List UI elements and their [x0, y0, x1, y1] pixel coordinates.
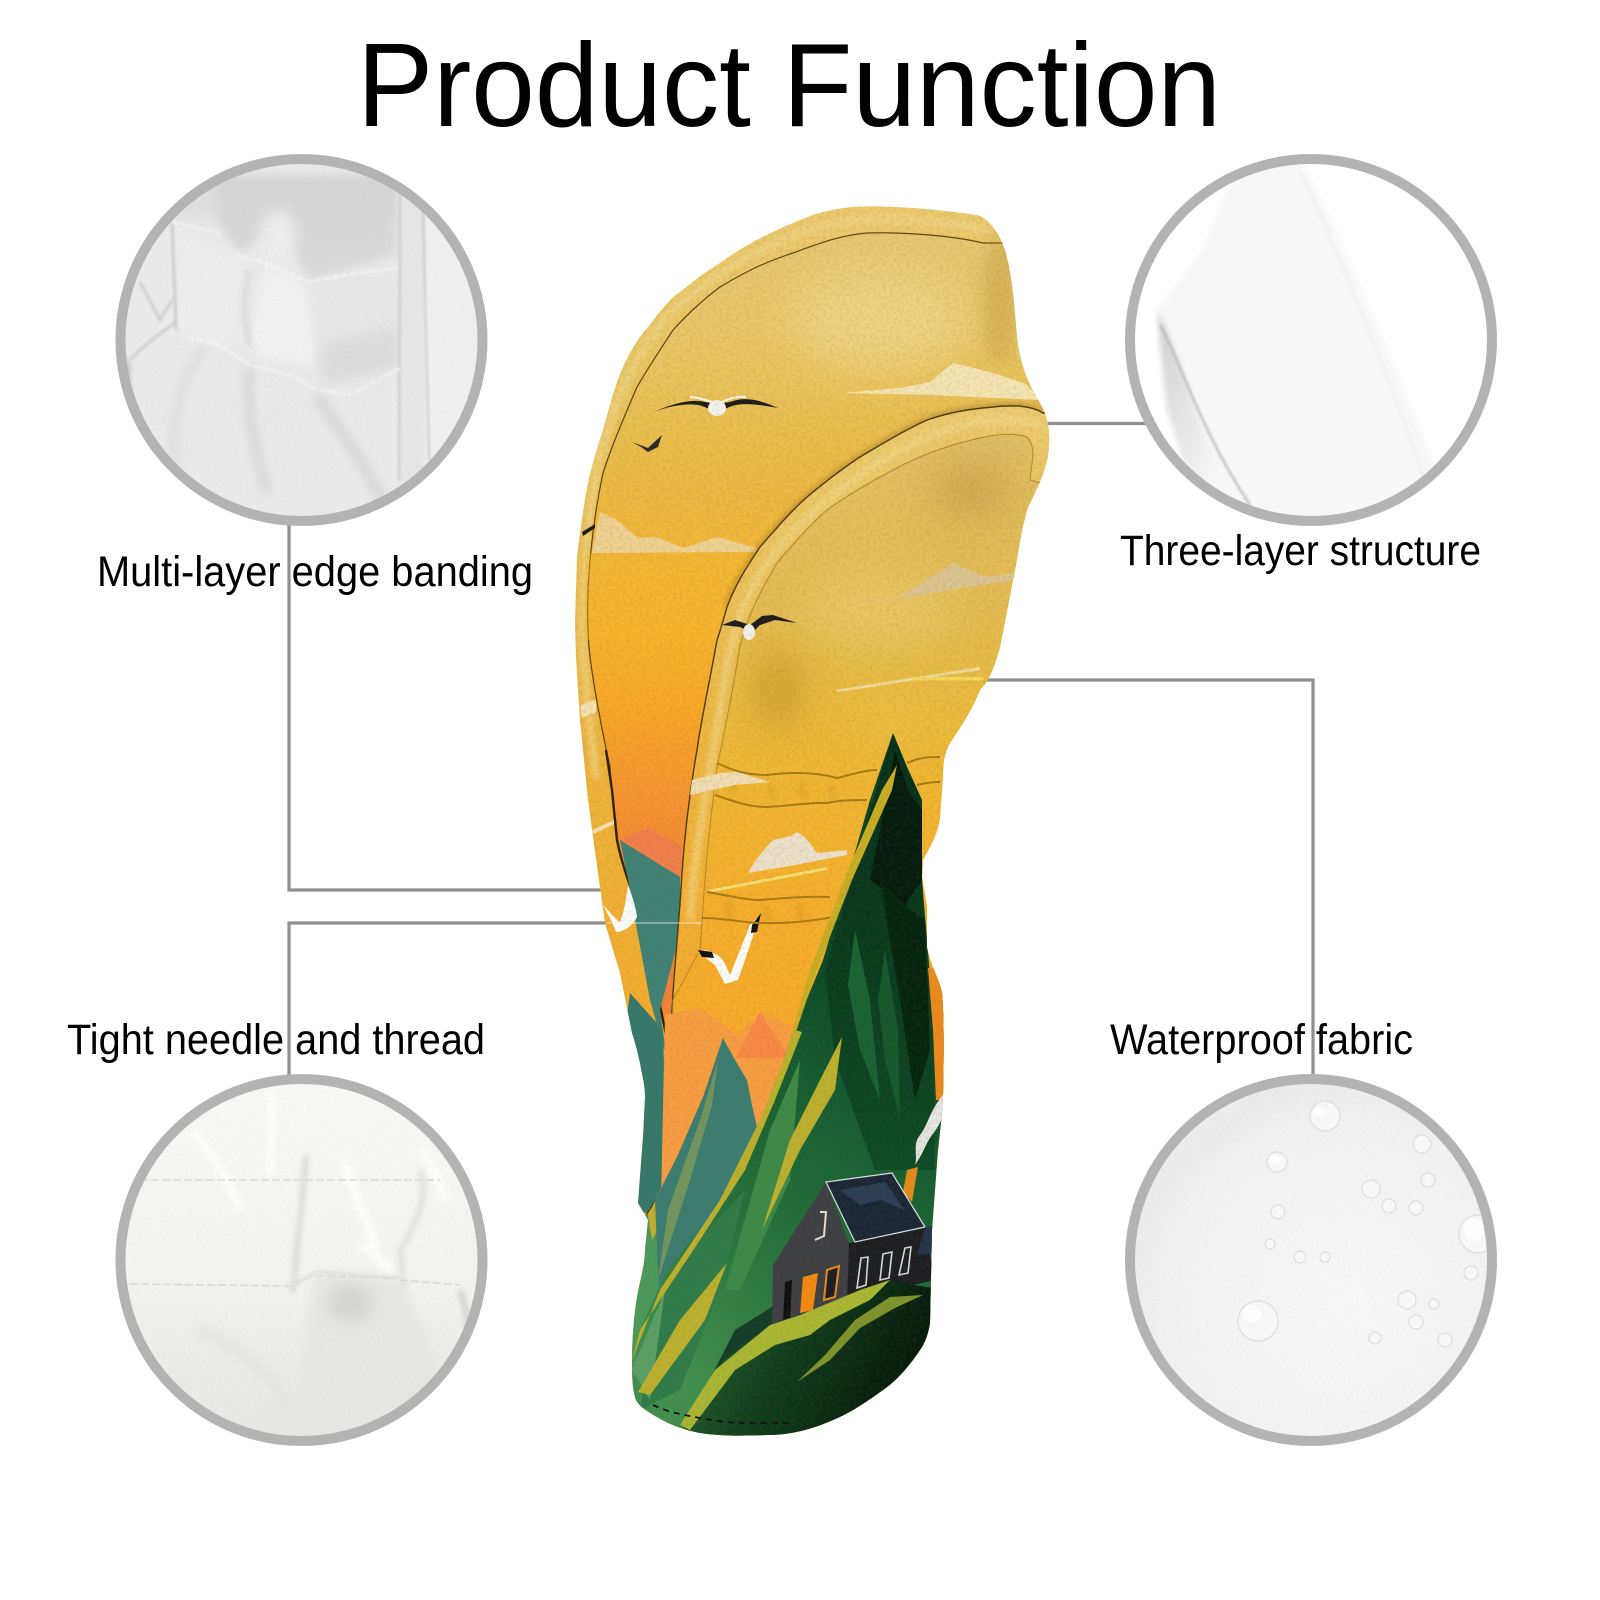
front panel — [660, 434, 1040, 1436]
title: Product Function — [357, 19, 1221, 152]
horizon streak lines — [835, 667, 983, 692]
back panel rim — [560, 190, 1060, 1450]
rear teal mountain — [620, 840, 680, 1060]
back rim highlight — [582, 219, 990, 780]
yellow mountain stripes — [632, 765, 897, 1395]
attic window — [815, 1212, 826, 1240]
connector: tight needle and thread — [289, 923, 610, 1076]
rear pale streaks — [580, 700, 614, 834]
connector: multi-layer edge banding — [289, 525, 604, 890]
orange door — [800, 1273, 818, 1313]
left flap gull — [603, 885, 637, 932]
panel: tight needle and thread detail — [110, 1070, 500, 1450]
lower left base — [632, 1215, 699, 1433]
front cloud top — [855, 563, 1013, 603]
panel: three-layer structure detail — [1130, 159, 1492, 540]
house side wall — [847, 1228, 935, 1300]
orange window — [824, 1266, 839, 1300]
front cast shadow — [727, 406, 1043, 607]
house roof — [826, 1173, 925, 1242]
bottom hem stitching — [653, 1405, 790, 1423]
product: golf club head cover — [575, 206, 1050, 1436]
front panel rim — [632, 405, 1050, 1436]
connector: waterproof fabric — [985, 680, 1313, 1076]
left lower leaves — [632, 1060, 800, 1410]
back panel — [588, 233, 1080, 1100]
front gull — [698, 913, 761, 984]
stitching rows — [702, 757, 940, 923]
hill lime ribbons — [680, 1280, 923, 1430]
label: multi-layer edge banding: Multi-layer edge banding — [97, 548, 533, 596]
label: waterproof fabric: Waterproof fabric — [1110, 1016, 1413, 1064]
panel: multi-layer edge banding detail — [110, 150, 500, 530]
front cloud pale — [690, 772, 770, 795]
bird: small gull — [632, 435, 662, 452]
chimney — [903, 1167, 918, 1202]
right orange strip — [928, 968, 950, 1100]
rear cloud large — [592, 512, 757, 553]
house gable — [772, 1182, 849, 1325]
tree shadow — [713, 1305, 775, 1373]
house annex roof — [917, 1225, 940, 1255]
teal mountain — [655, 1038, 757, 1288]
rear cloud top — [843, 363, 1040, 400]
rear sky band — [585, 553, 592, 640]
connector: three-layer structure — [1045, 422, 1150, 425]
bird: large gull — [653, 397, 778, 416]
left flap teal mountain — [628, 993, 664, 1213]
dark mountain shadows — [848, 750, 930, 1120]
label: tight needle and thread: Tight needle and thread — [67, 1016, 485, 1064]
orange sky band — [661, 1008, 794, 1188]
side windows — [857, 1247, 911, 1288]
chimney smoke — [915, 1095, 945, 1165]
coral peak — [735, 1012, 790, 1058]
roof light patch — [840, 1182, 905, 1210]
dark mountain body — [825, 733, 935, 1170]
label: three-layer structure: Three-layer structure — [1120, 527, 1481, 575]
front rim highlight — [690, 419, 1040, 920]
small gull on rim — [722, 615, 797, 640]
green mountain mass — [630, 733, 950, 1440]
bird: edge gull — [582, 524, 595, 536]
faint connector over fabric — [607, 922, 702, 924]
panel: waterproof fabric detail — [1120, 1070, 1510, 1450]
foreground hill — [680, 1280, 945, 1440]
rear coral mountain — [620, 828, 683, 877]
left yellow sliver — [648, 1190, 660, 1240]
front cloud white — [708, 832, 847, 892]
leather grain overlay — [560, 190, 1060, 1450]
back panel lower dark seam — [606, 750, 667, 1040]
house — [772, 1173, 940, 1325]
dark door — [783, 1280, 792, 1322]
front panel shading — [728, 458, 1017, 922]
